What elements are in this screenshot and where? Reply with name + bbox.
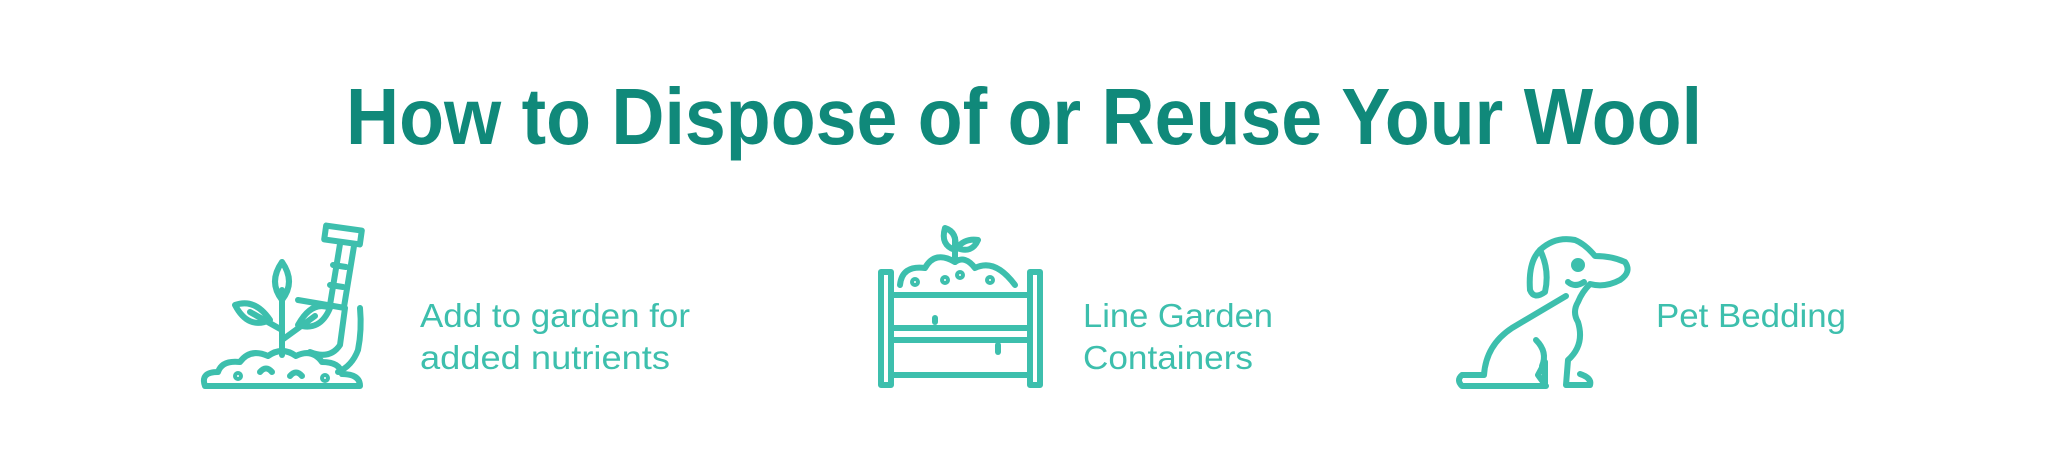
icon: dog (1459, 239, 1628, 386)
icon: garden container (881, 228, 1040, 385)
text: line containers (1083, 297, 1273, 376)
text: garden nutrients: added nutrients (420, 339, 670, 376)
text: line containers: Containers (1083, 339, 1253, 376)
title: How to Dispose of or Reuse Your Wool (346, 72, 1702, 161)
text: garden nutrients (420, 297, 690, 376)
text: pet bedding: Pet Bedding (1656, 297, 1846, 334)
text: line containers: Line Garden (1083, 297, 1273, 334)
text: garden nutrients: Add to garden for (420, 297, 690, 334)
icon: plant with shovel (204, 226, 362, 386)
